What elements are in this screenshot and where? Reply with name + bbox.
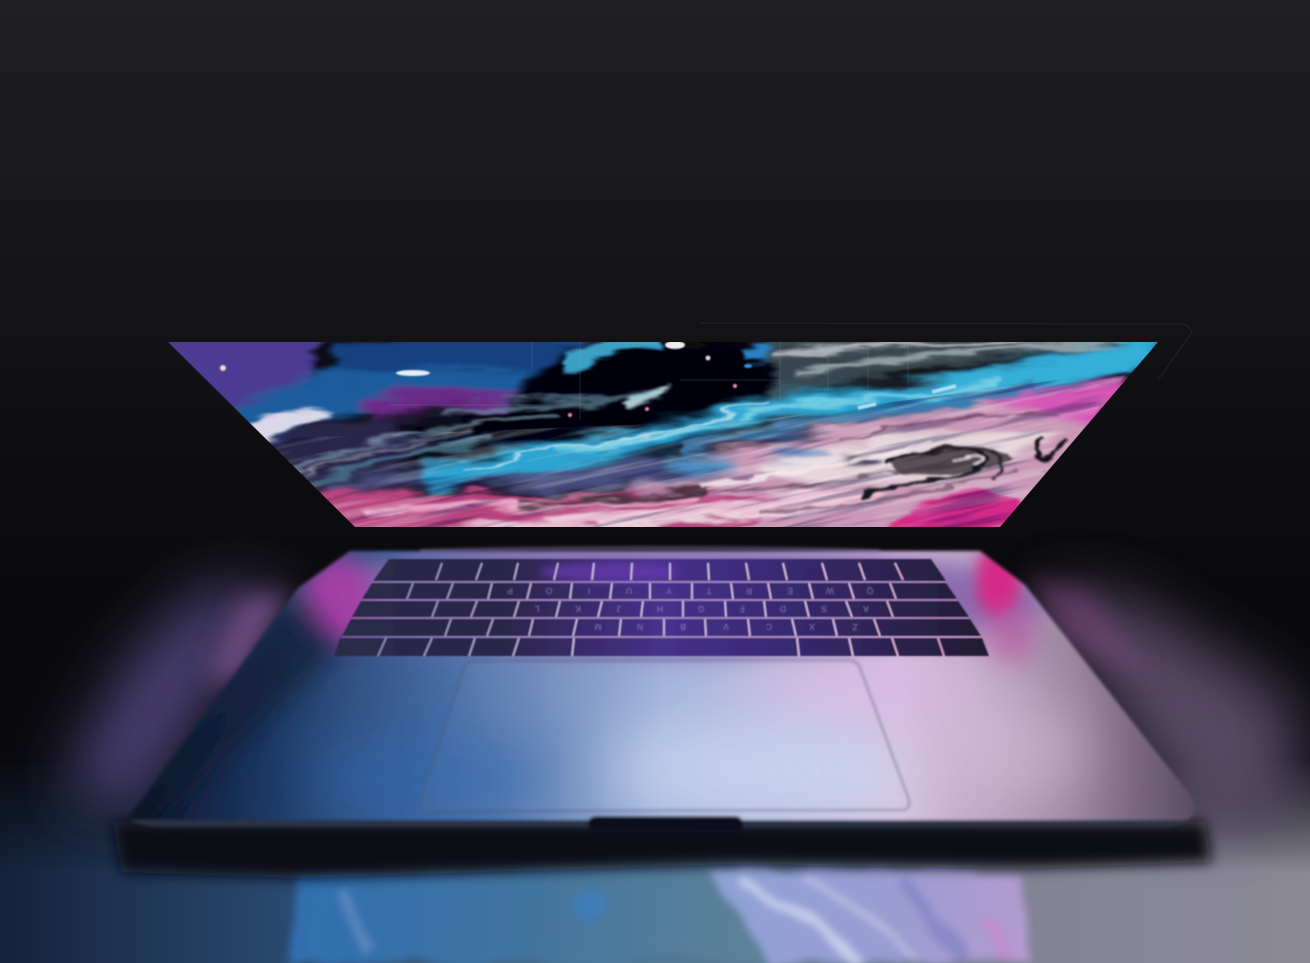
laptop base [100,542,1220,832]
marbled dark veins [266,371,1129,527]
small paint speckles [220,341,956,417]
upside-down key labels [507,586,873,632]
keyboard [334,559,989,656]
upside-down key labels: QWERTYUIOP [507,586,873,596]
black swirl [620,415,1062,512]
row 1 separators [407,583,896,599]
row 2 separators [432,601,893,617]
trackpad outline [420,660,909,811]
top blue highlight [560,338,778,410]
upper right grey streaks [760,342,1128,424]
magenta bottom right [885,486,1022,527]
laptop lid back edge [700,323,1192,380]
speckled blue mid band [320,446,880,498]
front thumb notch [588,816,743,832]
upside-down key labels: ASDFGHJKL [534,604,869,614]
pink and white marble right [600,379,1130,540]
row 4 separators [378,638,944,656]
table reflection of the screen [295,866,1030,963]
bright function key highlight [540,562,680,582]
laptop shadow on table [112,822,1211,878]
central black area [395,345,790,452]
key rows [334,559,989,656]
row gaps [342,582,981,637]
cyan swirl band [425,345,1160,478]
upside-down key labels: ZXCVBNM [594,622,858,632]
marbled white veins [270,374,1126,527]
table surface with coloured glow [0,578,1310,963]
laptop screen with marbled artwork [168,342,1158,527]
dark teal streaked area on the left [270,392,650,495]
hinge glow [420,548,880,551]
reflected keyboard lines on the screen [390,342,908,420]
row 3 separators [445,619,880,636]
row 0 separators [436,563,903,580]
deck lighting [100,542,1220,832]
pink bottom band [315,482,888,527]
top left purple and blue wash [168,342,596,490]
left white cloud [245,411,335,445]
